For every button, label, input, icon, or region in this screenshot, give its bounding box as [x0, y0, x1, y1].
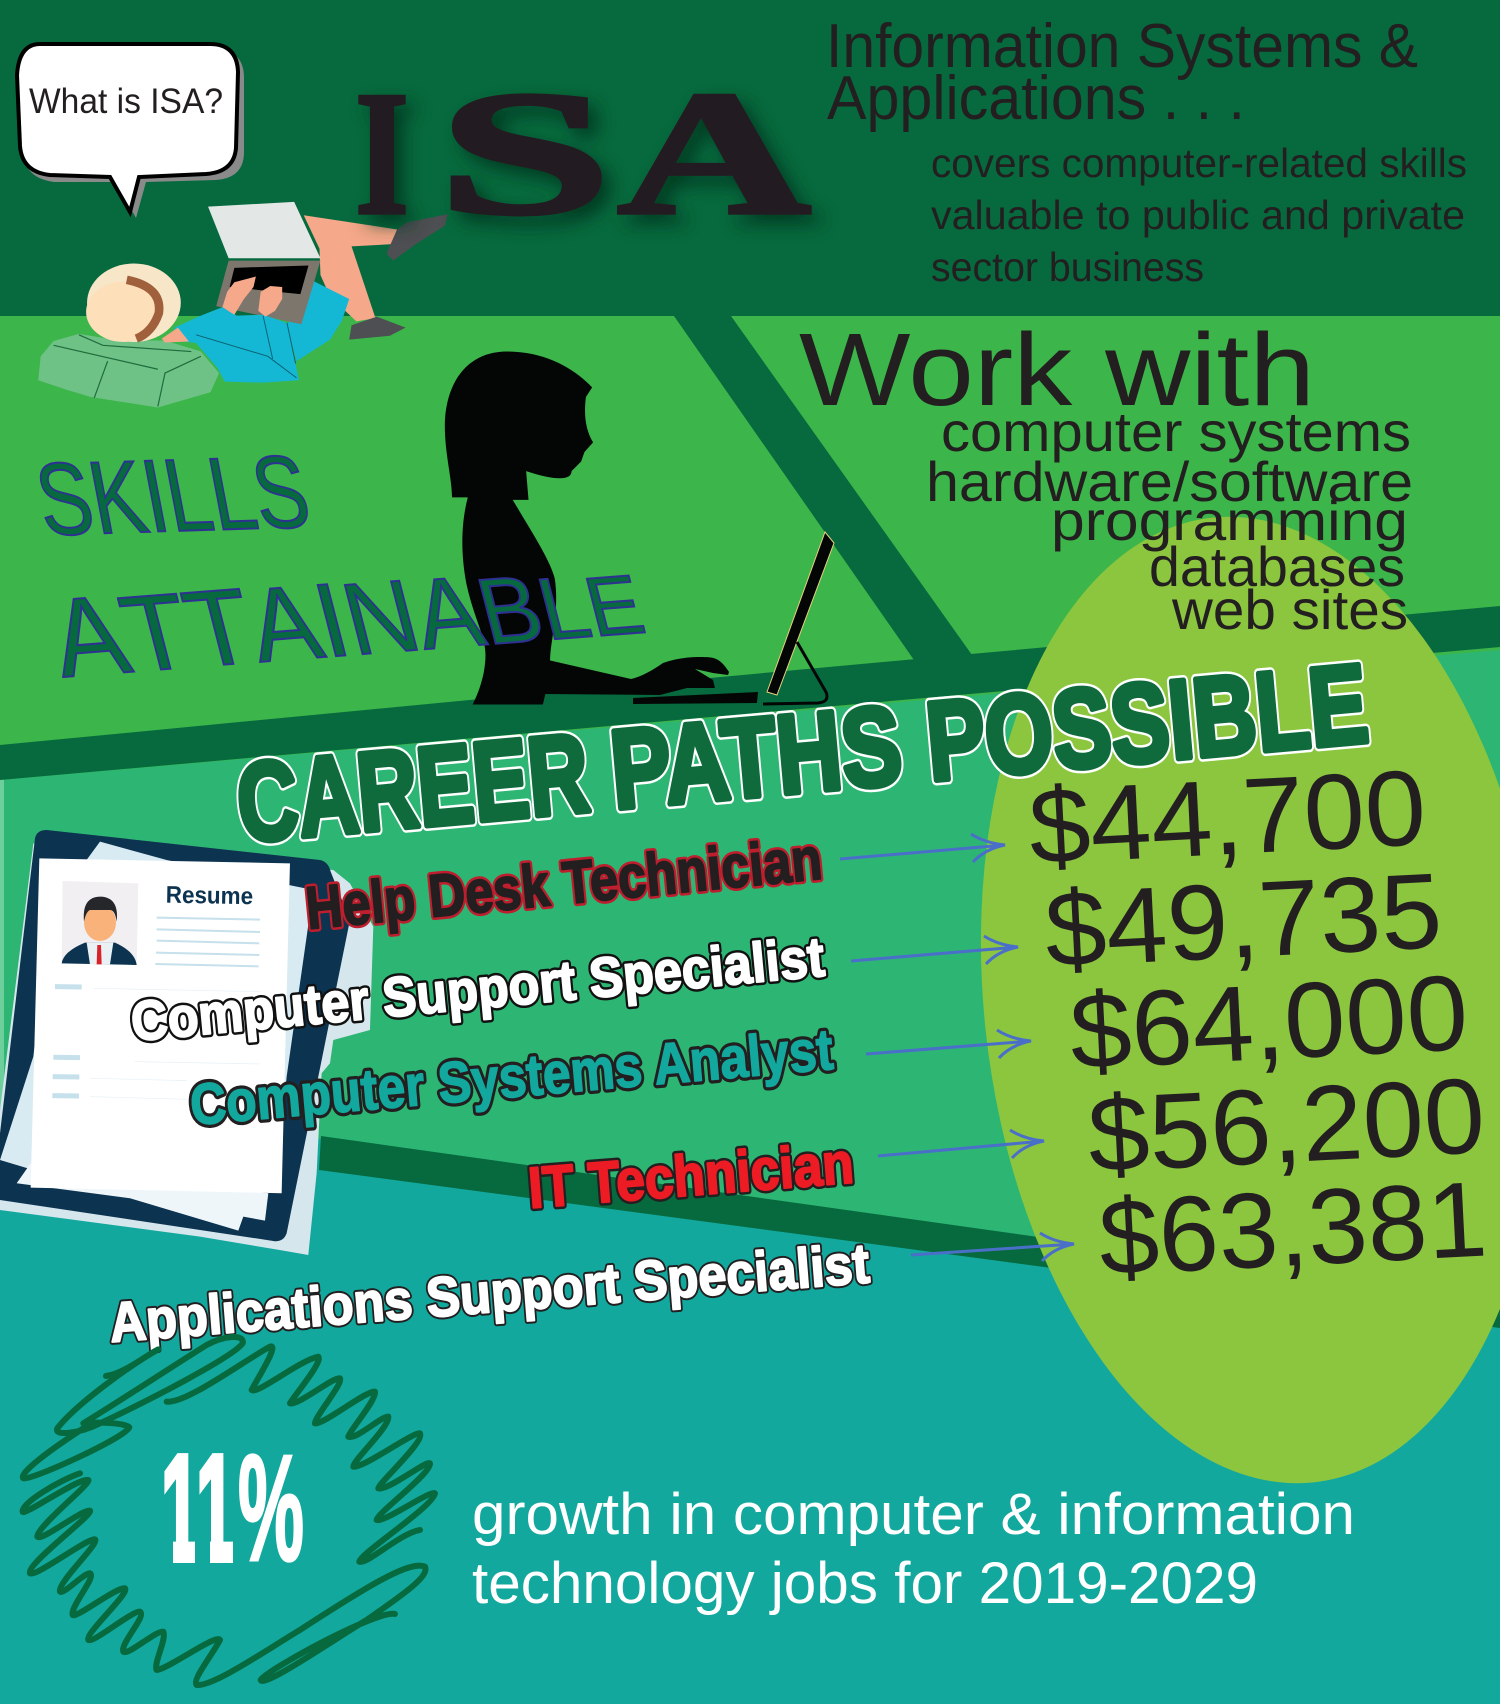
heading: SKILLS ATTAINABLE: SKILLS — [27, 434, 318, 557]
background: lower dark band — [319, 1136, 1500, 1328]
speech bubble text: What is ISA? — [29, 82, 223, 121]
arrows: job to salary — [840, 834, 1074, 1261]
hat — [86, 264, 189, 342]
resume title: Resume — [166, 882, 253, 910]
text: job growth — [472, 1482, 1355, 1616]
heading: Information Systems & Applications: Information Systems & — [826, 12, 1418, 81]
background: green ellipse — [935, 488, 1500, 1512]
text: ISA description: valuable to public and private — [931, 192, 1465, 238]
resume lines — [52, 918, 260, 1099]
text: % — [238, 1423, 304, 1592]
monitor stand — [763, 642, 827, 704]
title: ISA: A — [617, 54, 811, 252]
laptop keyboard — [230, 265, 309, 294]
heading: CAREER PATHS POSSIBLE: PATHS — [606, 682, 906, 833]
job: IT Technician: IT Technician — [526, 1131, 856, 1221]
heading: CAREER PATHS POSSIBLE: CAREER — [232, 710, 594, 866]
text: Work with list: Work with — [799, 312, 1315, 427]
legs — [304, 215, 398, 321]
title: ISA — [355, 54, 811, 252]
heading: SKILLS ATTAINABLE — [27, 434, 654, 700]
background: left edge strip — [0, 778, 4, 1108]
job: Applications Support Specialist: Applications Support Specialist — [107, 1231, 872, 1354]
heading: Information Systems & Applications — [826, 12, 1418, 133]
text: Work with list: hardware/software — [926, 450, 1413, 513]
background: skills section — [0, 316, 1500, 780]
salaries: $49,735 — [1042, 850, 1445, 990]
stat: 11%: 11 — [161, 1423, 235, 1592]
job: Help Desk Technician: Help Desk Technician — [303, 825, 825, 942]
heading: CAREER PATHS POSSIBLE: CAREER — [232, 710, 594, 866]
job: Computer Support Specialist: Computer Support Specialist — [128, 925, 827, 1053]
background: diagonal dark band — [674, 316, 972, 660]
job: Computer Systems Analyst: Computer Systems Analyst — [187, 1017, 836, 1138]
heading: CAREER PATHS POSSIBLE: POSSIBLE — [921, 641, 1373, 804]
job: Computer Support Specialist: Computer Support Specialist — [128, 925, 827, 1053]
text: Work with list: programming — [1051, 489, 1408, 552]
heading: SKILLS ATTAINABLE: ATTAINABLE — [37, 532, 654, 700]
monitor — [767, 532, 834, 695]
back paper — [0, 842, 313, 1187]
text: Work with list: computer systems — [941, 400, 1411, 463]
job: Computer Systems Analyst: Computer Systems Analyst — [187, 1017, 836, 1138]
salaries: $64,000 — [1067, 952, 1471, 1092]
text: job growth: technology jobs for 2019-2029 — [472, 1551, 1258, 1616]
title: ISA: S — [437, 54, 612, 252]
photo — [62, 881, 138, 965]
heading: CAREER PATHS POSSIBLE: PATHS — [606, 682, 906, 833]
text: Work with list — [799, 312, 1413, 641]
shirt — [175, 307, 299, 383]
salaries: $44,700 — [1026, 747, 1429, 887]
shorts — [287, 280, 349, 361]
arm and hand — [543, 657, 729, 695]
laptop screen — [208, 202, 320, 258]
title: ISA: I — [355, 54, 409, 252]
salaries: $56,200 — [1085, 1055, 1488, 1195]
heading: CAREER PATHS POSSIBLE — [232, 641, 1373, 866]
job: IT Technician: IT Technician — [526, 1131, 856, 1221]
salaries: $63,381 — [1096, 1158, 1490, 1298]
illustration: resume clipboard — [0, 830, 373, 1255]
illustration: person lying with laptop — [38, 202, 448, 408]
cutout edge — [0, 843, 373, 1255]
text: Work with list: web sites — [1171, 578, 1408, 641]
scribble circle — [23, 1337, 435, 1685]
heading: Information Systems & Applications: Applications . . . — [827, 64, 1245, 133]
stat: 11% — [164, 1453, 303, 1563]
job: Help Desk Technician: Help Desk Technician — [303, 825, 825, 942]
heading: CAREER PATHS POSSIBLE: POSSIBLE — [921, 641, 1373, 804]
salaries — [1026, 747, 1490, 1298]
hands — [222, 276, 282, 317]
background: career section — [0, 647, 1500, 1304]
text: job growth: growth in computer & information — [472, 1482, 1355, 1547]
background: top header band — [0, 0, 1500, 316]
pillow — [38, 334, 219, 408]
shoes — [349, 214, 448, 340]
laptop base — [216, 261, 320, 324]
text: ISA description: sector business — [931, 244, 1204, 290]
speech bubble — [17, 44, 244, 218]
text: ISA description — [931, 140, 1467, 290]
text: ISA description: covers computer-related skills — [931, 140, 1467, 186]
job: Applications Support Specialist: Applications Support Specialist — [107, 1231, 872, 1354]
text: Work with list: databases — [1149, 535, 1405, 598]
head and torso — [445, 352, 593, 705]
middle paper — [17, 1163, 268, 1231]
main paper — [31, 858, 290, 1193]
background: slanted dark band — [0, 606, 1500, 780]
shirt folds — [196, 316, 297, 378]
silhouette: woman at computer — [445, 352, 834, 705]
keyboard — [633, 692, 758, 704]
clipboard — [0, 830, 350, 1241]
